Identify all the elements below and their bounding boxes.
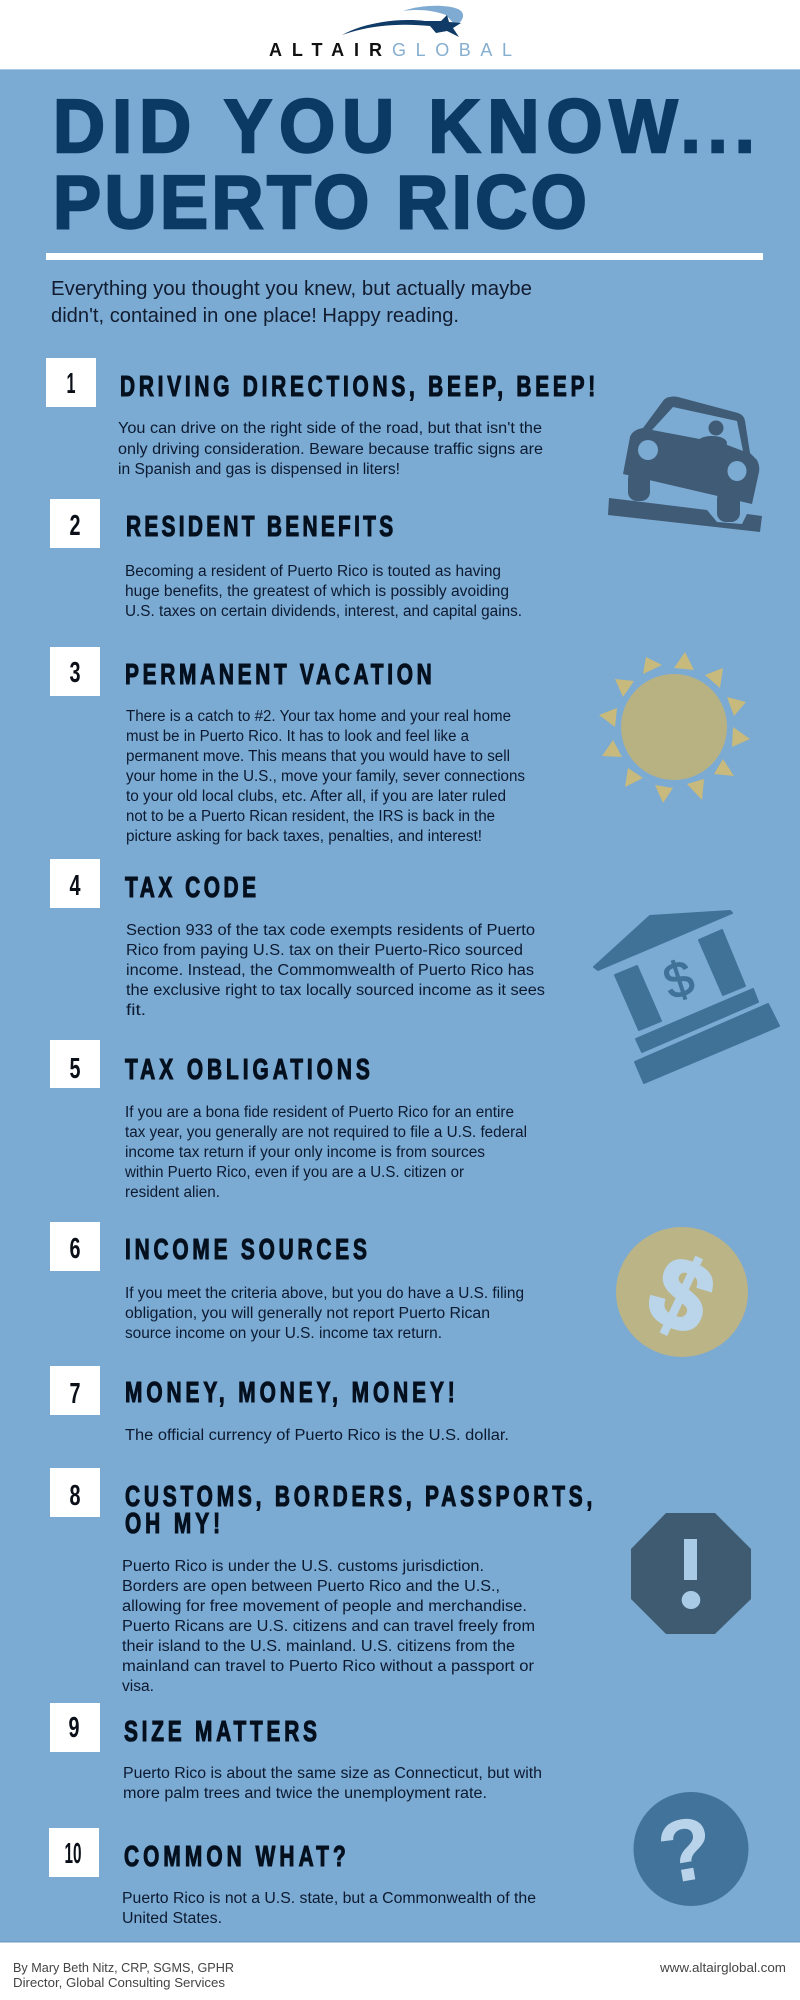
- text block 8: Puerto Ricans are U.S. citizens and can travel freely from: [122, 1618, 535, 1635]
- number box 4: 4: [70, 870, 80, 902]
- number box 8: [50, 1468, 100, 1517]
- icon: bank: [594, 911, 779, 1083]
- text block 10: United States.: [122, 1910, 222, 1927]
- panel: item 1: [46, 358, 595, 478]
- number box 6: [50, 1222, 100, 1271]
- text block 7: The official currency of Puerto Rico is the U.S. dollar.: [125, 1427, 509, 1444]
- subtitle: [51, 278, 532, 327]
- number box 1: 1: [66, 368, 76, 400]
- text block 5: If you are a bona fide resident of Puerto Rico for an entire: [125, 1104, 514, 1121]
- panel: item 7: [50, 1366, 509, 1444]
- website: www.altairglobal.com: [659, 1961, 786, 1975]
- number box 3: 3: [70, 657, 80, 689]
- text block 3: your home in the U.S., move your family, sever connections: [126, 768, 525, 785]
- author credit: Director, Global Consulting Services: [13, 1976, 225, 1990]
- heading 5: TAX OBLIGATIONS: [125, 1054, 370, 1086]
- text block 2: U.S. taxes on certain dividends, interest, and capital gains.: [125, 603, 522, 620]
- text block 1: You can drive on the right side of the road, but that isn't the: [118, 420, 542, 437]
- heading 1: DRIVING DIRECTIONS, BEEP, BEEP!: [120, 371, 595, 403]
- text block 5: within Puerto Rico, even if you are a U.S. citizen or: [124, 1164, 464, 1181]
- logo wordmark: ALTAIR: [269, 40, 382, 60]
- title: DID YOU KNOW...: [53, 84, 755, 168]
- logo wordmark: GLOBAL: [392, 40, 512, 60]
- icon: car: [608, 396, 762, 532]
- text block 4: income. Instead, the Commomwealth of Puerto Rico has: [126, 962, 534, 979]
- number box 9: [50, 1703, 100, 1752]
- text block 8: [122, 1558, 535, 1695]
- header strip with logo: [0, 0, 800, 70]
- panel: item 8: [50, 1468, 592, 1695]
- icon: shooting star: [342, 6, 463, 37]
- number box 2: 2: [70, 510, 80, 542]
- text block 9: more palm trees and twice the unemployment rate.: [123, 1785, 487, 1802]
- text block 6: If you meet the criteria above, but you do have a U.S. filing: [125, 1285, 524, 1302]
- heading 10: COMMON WHAT?: [124, 1841, 346, 1873]
- heading 8: [125, 1481, 592, 1540]
- heading 8: CUSTOMS, BORDERS, PASSPORTS,: [125, 1481, 592, 1513]
- text block 1: in Spanish and gas is dispensed in liters!: [118, 461, 400, 478]
- text block 6: [125, 1285, 524, 1342]
- number box 6: 6: [70, 1233, 80, 1265]
- heading 3: PERMANENT VACATION: [125, 659, 432, 691]
- text block 5: tax year, you generally are not required to file a U.S. federal: [125, 1124, 527, 1141]
- heading 6: INCOME SOURCES: [125, 1234, 367, 1266]
- number box 5: 5: [70, 1053, 80, 1085]
- panel: item 9: [50, 1703, 542, 1802]
- text block 9: Puerto Rico is about the same size as Connecticut, but with: [123, 1765, 542, 1782]
- number box 10: [49, 1828, 99, 1877]
- title: [53, 84, 755, 244]
- text block 10: [122, 1890, 536, 1927]
- text block 3: to your old local clubs, etc. After all, if you are later ruled: [126, 788, 506, 805]
- text block 1: [118, 420, 543, 478]
- number box 3: [50, 647, 100, 696]
- text block 4: Rico from paying U.S. tax on their Puerto-Rico sourced: [126, 942, 523, 959]
- number box 5: [50, 1040, 100, 1088]
- panel: item 3: [50, 647, 525, 845]
- panel: item 5: [50, 1040, 527, 1201]
- panel: item 2: [50, 499, 522, 620]
- text block 5: [124, 1104, 527, 1201]
- number box 8: 8: [70, 1480, 80, 1512]
- number box 9: 9: [68, 1712, 80, 1744]
- icon: warning octagon: [631, 1513, 751, 1634]
- heading 8: OH MY!: [125, 1508, 220, 1540]
- text block 10: Puerto Rico is not a U.S. state, but a Commonwealth of the: [122, 1890, 536, 1907]
- subtitle: didn't, contained in one place! Happy reading.: [51, 305, 459, 327]
- author credit: [13, 1961, 234, 1990]
- number box 10: 10: [64, 1838, 82, 1870]
- heading 4: TAX CODE: [125, 872, 256, 904]
- footer: [0, 1941, 800, 2000]
- text block 5: resident alien.: [125, 1184, 220, 1201]
- text block 6: source income on your U.S. income tax return.: [125, 1325, 442, 1342]
- text block 3: permanent move. This means that you would have to sell: [126, 748, 510, 765]
- number box 7: [50, 1366, 100, 1415]
- text block 8: their island to the U.S. mainland. U.S. citizens from the: [122, 1638, 515, 1655]
- icon: bank: $: [657, 949, 701, 1011]
- number box 1: [46, 358, 96, 407]
- number box 7: 7: [70, 1378, 80, 1410]
- number box 2: [50, 499, 100, 548]
- text block 3: There is a catch to #2. Your tax home and your real home: [126, 708, 511, 725]
- text block 4: [126, 922, 545, 1019]
- text block 2: Becoming a resident of Puerto Rico is touted as having: [125, 563, 501, 580]
- text block 4: fit.: [126, 1002, 146, 1019]
- icon: sun: [599, 652, 750, 803]
- text block 1: only driving consideration. Beware because traffic signs are: [118, 441, 543, 458]
- text block 9: [123, 1765, 542, 1802]
- text block 2: [125, 563, 522, 620]
- author credit: By Mary Beth Nitz, CRP, SGMS, GPHR: [13, 1961, 234, 1975]
- text block 3: not to be a Puerto Rican resident, the IRS is back in the: [126, 808, 495, 825]
- panel: item 10: [49, 1828, 536, 1927]
- text block 4: Section 933 of the tax code exempts residents of Puerto: [126, 922, 535, 939]
- heading 2: RESIDENT BENEFITS: [126, 511, 393, 543]
- logo wordmark: [269, 40, 512, 60]
- text block 3: picture asking for back taxes, penalties, and interest!: [126, 828, 482, 845]
- text block 4: the exclusive right to tax locally sourced income as it sees: [126, 982, 545, 999]
- heading 9: SIZE MATTERS: [124, 1716, 317, 1748]
- number box 4: [50, 859, 100, 908]
- panel: item 6: [50, 1222, 524, 1342]
- text block 8: visa.: [122, 1678, 154, 1695]
- text block 8: allowing for free movement of people and merchandise.: [122, 1598, 527, 1615]
- heading 7: MONEY, MONEY, MONEY!: [125, 1377, 455, 1409]
- text block 8: mainland can travel to Puerto Rico without a passport or: [122, 1658, 534, 1675]
- icon: question mark: [634, 1792, 748, 1906]
- title: PUERTO RICO: [53, 160, 587, 244]
- text block 8: Borders are open between Puerto Rico and the U.S.,: [122, 1578, 500, 1595]
- text block 3: must be in Puerto Rico. It has to look and feel like a: [126, 728, 469, 745]
- icon: question mark: ?: [651, 1797, 721, 1903]
- text block 2: huge benefits, the greatest of which is possibly avoiding: [125, 583, 509, 600]
- subtitle: Everything you thought you knew, but actually maybe: [51, 278, 532, 300]
- text block 3: [126, 708, 525, 845]
- icon: dollar coin: $: [632, 1233, 730, 1358]
- text block 8: Puerto Rico is under the U.S. customs jurisdiction.: [122, 1558, 484, 1575]
- panel: item 4: [50, 859, 545, 1019]
- text block 6: obligation, you will generally not report Puerto Rican: [125, 1305, 490, 1322]
- text block 5: income tax return if your only income is from sources: [125, 1144, 485, 1161]
